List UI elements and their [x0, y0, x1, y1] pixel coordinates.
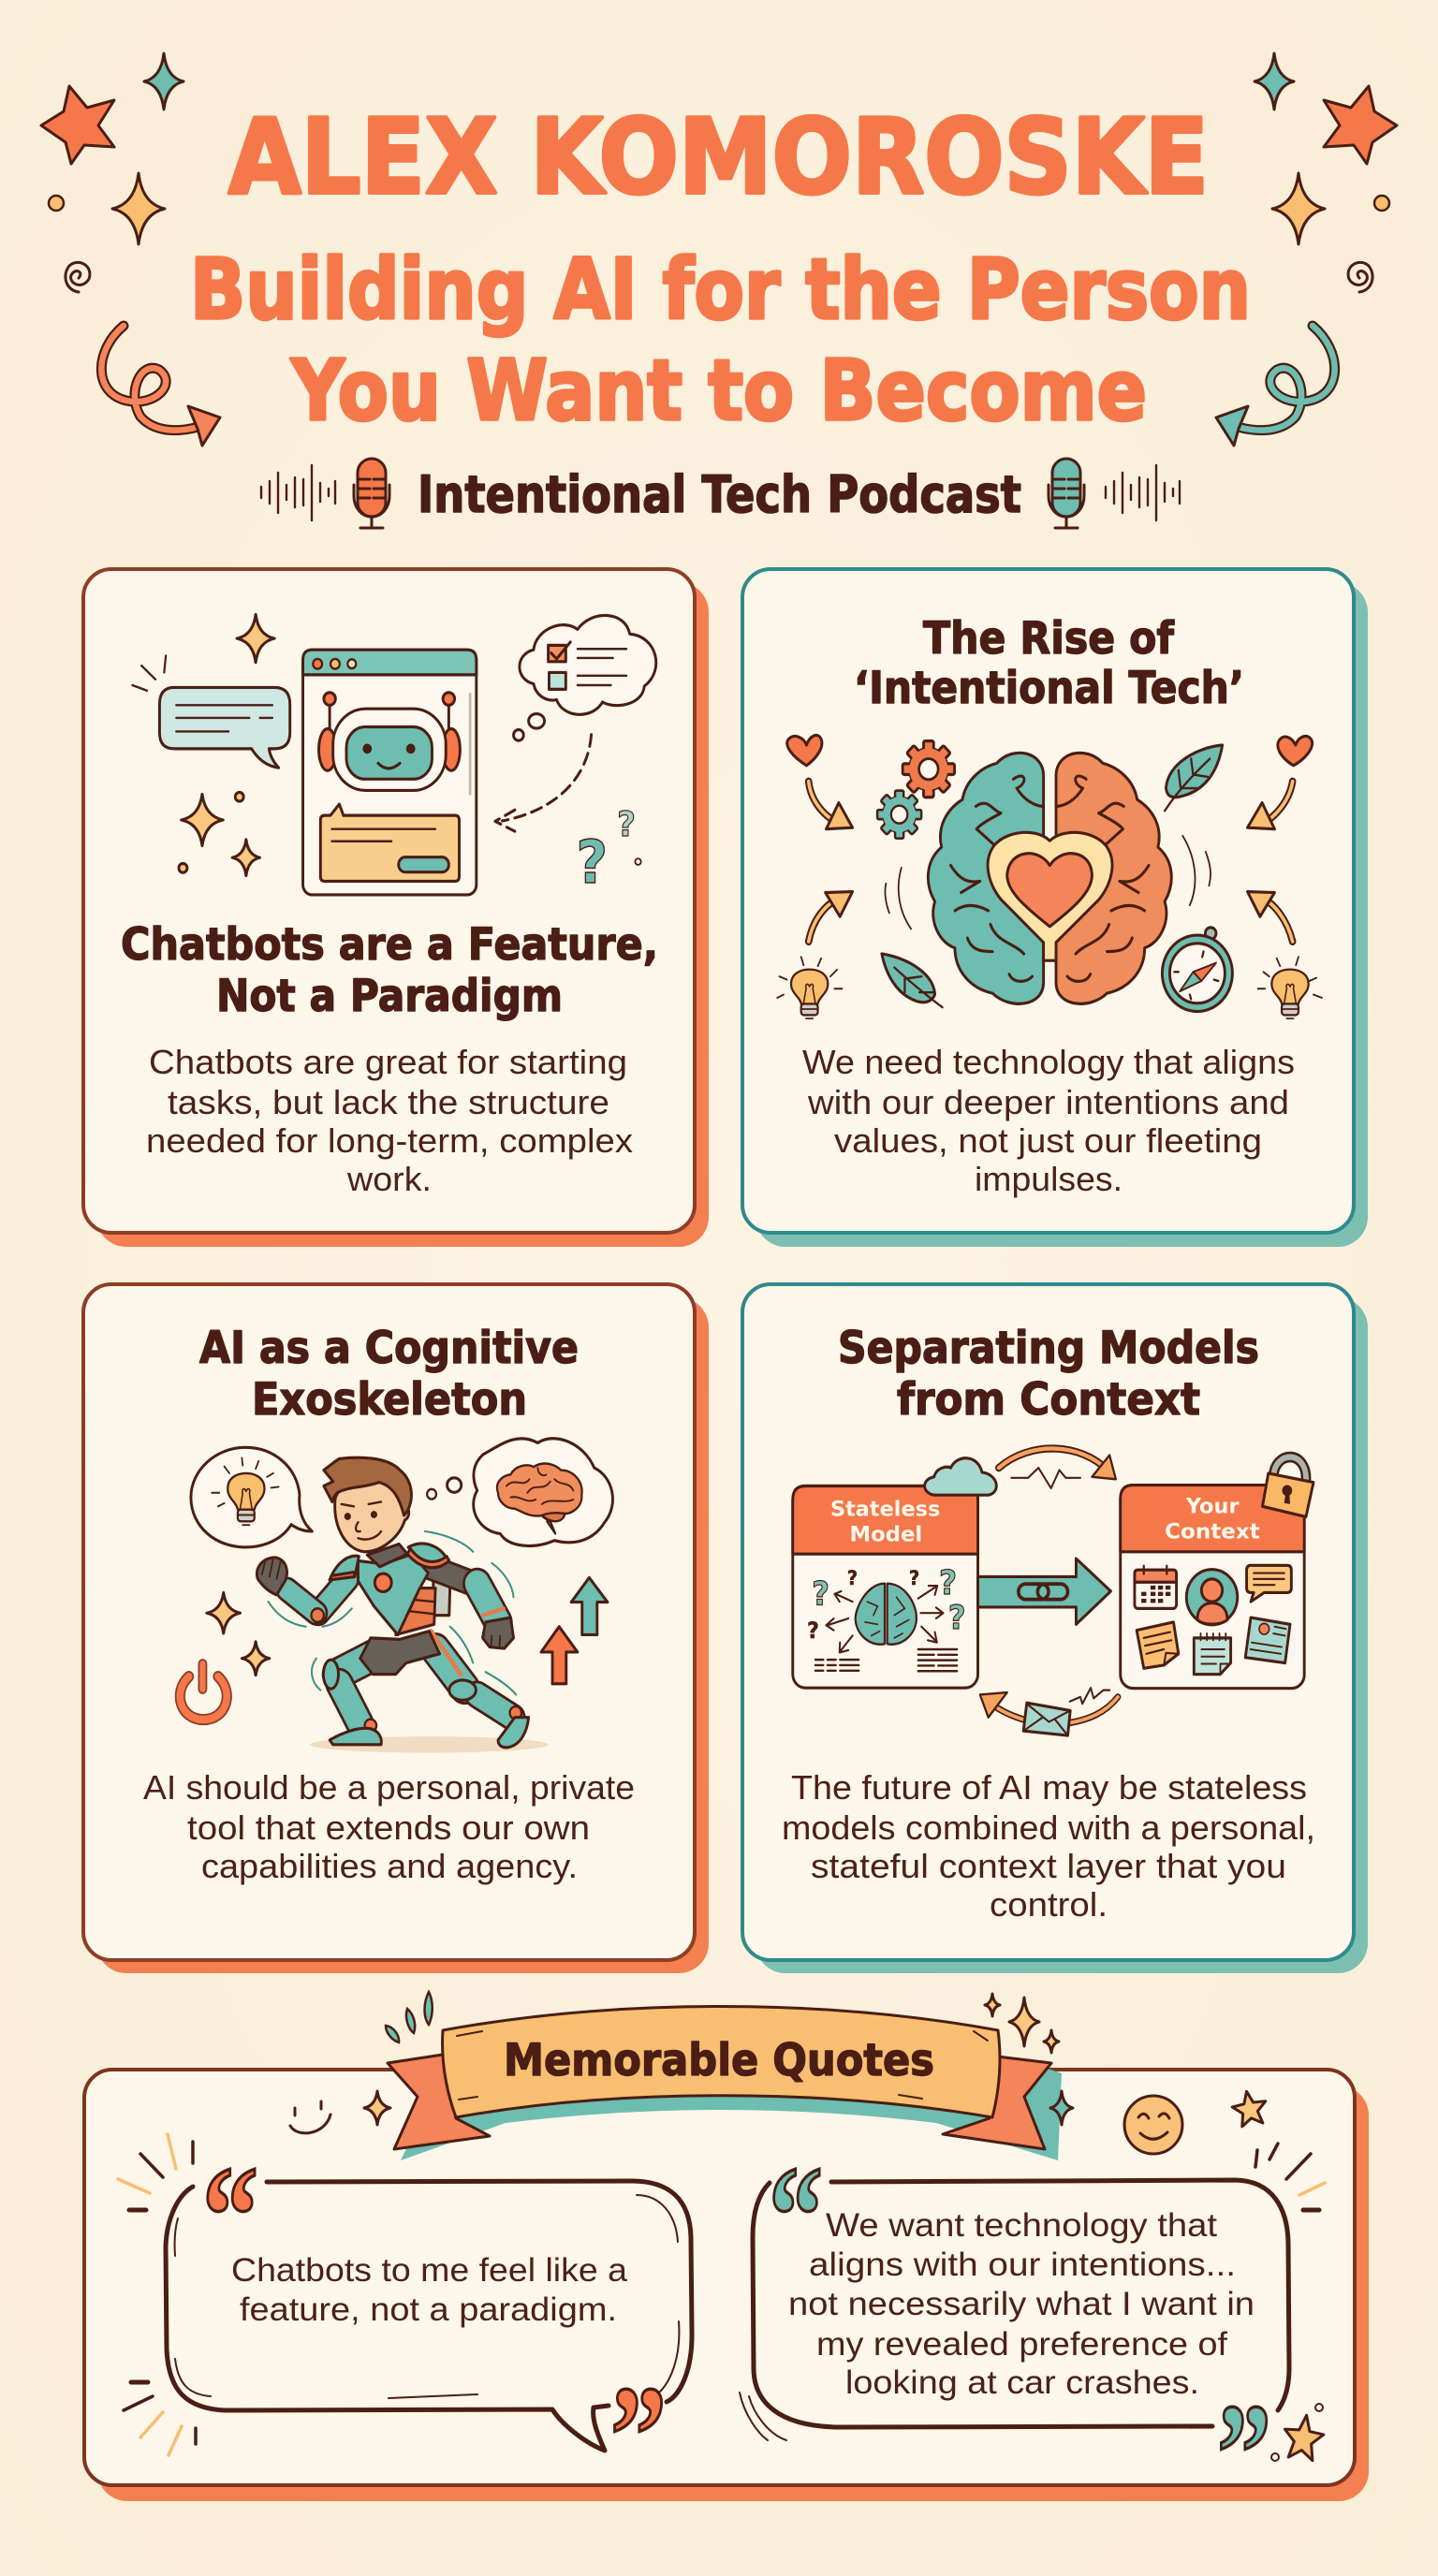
heading: intentional tech: ‘Intentional Tech’ [854, 663, 1244, 714]
quote text right: my revealed preference of [816, 2326, 1227, 2363]
quote text left [231, 2252, 628, 2328]
banner: memorable quotes [388, 2007, 1062, 2160]
decorations: rays and stars [118, 2134, 1326, 2462]
heading: cognitive exoskeleton: AI as a Cognitive [199, 1323, 579, 1374]
icon: spiral right [1348, 262, 1372, 292]
icon: notepad [1194, 1633, 1231, 1675]
heading: chatbots: Not a Paradigm [216, 971, 563, 1022]
quote marks left [202, 2138, 667, 2513]
panel: stateless model card [793, 1486, 978, 1688]
body text: chatbots: Chatbots are great for starting [149, 1043, 627, 1081]
body text: chatbots [146, 1043, 633, 1198]
icon: amber dot right [1374, 196, 1389, 211]
heading: cognitive exoskeleton [199, 1323, 579, 1426]
icon: question marks and arrows: ? [847, 1566, 858, 1589]
icon: padlock [1263, 1457, 1313, 1516]
subtitle: You Want to Become [290, 342, 1147, 439]
decorations: around banner [290, 1992, 1269, 2154]
illustration: models to context [793, 1448, 1313, 1735]
body text: chatbots: work. [346, 1160, 432, 1198]
icon: spiral left [66, 262, 90, 292]
icon: question marks and arrows: ? [807, 1617, 819, 1644]
illustration: exoskeleton person [180, 1439, 612, 1753]
icon: question marks: ? [577, 829, 608, 897]
quote bubble left [166, 2138, 692, 2513]
heading: models and context [838, 1323, 1259, 1426]
ground shadow [310, 1736, 549, 1753]
arrows: pointing inward [809, 782, 1293, 942]
icon: chat bubble [1247, 1565, 1291, 1602]
icon: sparkles [179, 614, 274, 876]
icon: brain [928, 753, 1171, 1003]
icon: sparkles and motion lines [207, 1531, 516, 1694]
body text: intentional tech: We need technology that aligns [802, 1043, 1295, 1081]
panel: chatbots [83, 569, 709, 1247]
quote bubble right [740, 2138, 1289, 2531]
panel: cognitive exoskeleton [83, 1284, 709, 1973]
icon: teal sparkle left [144, 53, 183, 110]
label: your context: Context [1165, 1520, 1260, 1544]
arrow: top amber [999, 1448, 1116, 1488]
arrow: bottom amber with envelope [980, 1688, 1118, 1735]
heading: chatbots: Chatbots are a Feature, [121, 919, 658, 971]
body text: chatbots: tasks, but lack the structure [168, 1083, 609, 1121]
header [41, 53, 1397, 528]
heading: intentional tech [854, 613, 1244, 714]
body text: models and context: stateful context layer that you [811, 1847, 1286, 1885]
body text: cognitive exoskeleton: capabilities and agency. [201, 1847, 578, 1885]
icon: leaves [882, 745, 1223, 1007]
icon: orange star left [41, 86, 114, 164]
podcast name: Intentional Tech Podcast [418, 465, 1021, 524]
quote marks right: ” [1217, 2376, 1271, 2531]
body text: cognitive exoskeleton [143, 1768, 635, 1885]
icon: up arrows [541, 1577, 608, 1684]
heading: cognitive exoskeleton: Exoskeleton [252, 1374, 527, 1426]
panel: your context card [1121, 1486, 1304, 1689]
icon: cloud [925, 1458, 996, 1495]
motion lines [885, 836, 1211, 929]
icon: person [1186, 1570, 1238, 1625]
body text: intentional tech: with our deeper intentions and [807, 1083, 1289, 1121]
quote text right: We want technology that [826, 2207, 1217, 2244]
icon: hearts [787, 736, 1313, 766]
icon: profile card [1245, 1617, 1290, 1663]
icon: small brain [856, 1584, 917, 1645]
illustration: chatbot window [132, 614, 656, 897]
icon: question marks [577, 805, 641, 897]
arrow: dashed [495, 735, 592, 831]
quote text right: looking at car crashes. [845, 2364, 1199, 2401]
icon: light bulbs [777, 957, 1322, 1018]
quote text right: not necessarily what I want in [788, 2286, 1255, 2322]
icon: question marks and arrows: ? [909, 1566, 919, 1589]
icon: compass [1162, 928, 1232, 1012]
label: stateless model [830, 1498, 940, 1547]
icon: amber sparkle right [1272, 173, 1325, 244]
icon: question marks: ? [617, 805, 636, 844]
quote marks right: “ [769, 2138, 823, 2293]
body text: models and context: The future of AI may be stateless [791, 1768, 1307, 1807]
subtitle [190, 241, 1251, 439]
body text: chatbots: needed for long-term, complex [146, 1121, 633, 1160]
icon: microphone left [354, 459, 389, 528]
heading: models and context: from Context [897, 1374, 1200, 1426]
banner title: Memorable Quotes [504, 2035, 934, 2086]
quote marks left: “ [202, 2138, 258, 2293]
body text: models and context: models combined with a personal, [782, 1808, 1315, 1847]
icon: brain thought cloud [427, 1439, 612, 1545]
icon: question marks and arrows [807, 1564, 965, 1671]
icon: question marks and arrows: ? [939, 1564, 957, 1603]
title: ALEX KOMOROSKE [228, 97, 1209, 218]
icon: orange star right [1324, 86, 1397, 164]
quote text left: feature, not a paradigm. [240, 2291, 617, 2328]
heading: models and context: Separating Models [838, 1323, 1259, 1374]
body text: intentional tech: impulses. [975, 1160, 1123, 1198]
icon: power button [180, 1664, 227, 1720]
quote marks right [769, 2138, 1271, 2531]
icon: question marks and arrows: ? [948, 1599, 965, 1637]
icon: amber dot left [49, 196, 64, 211]
body text: intentional tech [802, 1043, 1295, 1198]
heading: intentional tech: The Rise of [923, 613, 1174, 665]
label: your context: Your [1185, 1495, 1240, 1519]
subtitle: Building AI for the Person [190, 241, 1251, 338]
label: stateless model: Stateless [830, 1498, 940, 1522]
icon: sound wave left [261, 465, 335, 520]
arrow: teal loop [1216, 326, 1335, 446]
icon: sticky note [1137, 1622, 1179, 1668]
icon: thought cloud checklist [514, 615, 656, 740]
icon: question marks and arrows: ? [812, 1574, 829, 1613]
arrow: orange loop [101, 326, 220, 446]
icon: person in exoskeleton [257, 1457, 529, 1748]
icon: app window with robot [303, 650, 477, 895]
panel: memorable quotes [84, 1992, 1369, 2531]
label: your context [1165, 1495, 1260, 1544]
icon: sound wave right [1106, 465, 1180, 520]
icon: calendar [1135, 1566, 1177, 1608]
illustration: brain with heart [777, 736, 1322, 1018]
arrow: teal centre with chain [978, 1559, 1110, 1624]
body text: models and context [782, 1768, 1315, 1924]
icon: speech bubble [132, 656, 290, 768]
label: stateless model: Model [849, 1523, 922, 1547]
body text: cognitive exoskeleton: AI should be a personal, private [143, 1768, 635, 1807]
panel: intentional tech [742, 569, 1368, 1247]
icon: amber sparkle left [112, 173, 165, 244]
body text: intentional tech: values, not just our fleeting [834, 1121, 1262, 1160]
body text: models and context: control. [990, 1885, 1108, 1924]
quote text right [788, 2207, 1255, 2401]
body text: cognitive exoskeleton: tool that extends our own [187, 1808, 590, 1847]
icon: gears [877, 741, 955, 839]
icon: teal sparkle right [1255, 53, 1294, 110]
heading: chatbots [121, 919, 658, 1022]
quote text left: Chatbots to me feel like a [231, 2252, 628, 2289]
quote text right: aligns with our intentions... [809, 2247, 1236, 2283]
quote marks left: ” [610, 2358, 667, 2513]
icon: idea bubble [191, 1447, 312, 1547]
panel: models and context [742, 1284, 1368, 1973]
icon: microphone right [1049, 459, 1084, 528]
